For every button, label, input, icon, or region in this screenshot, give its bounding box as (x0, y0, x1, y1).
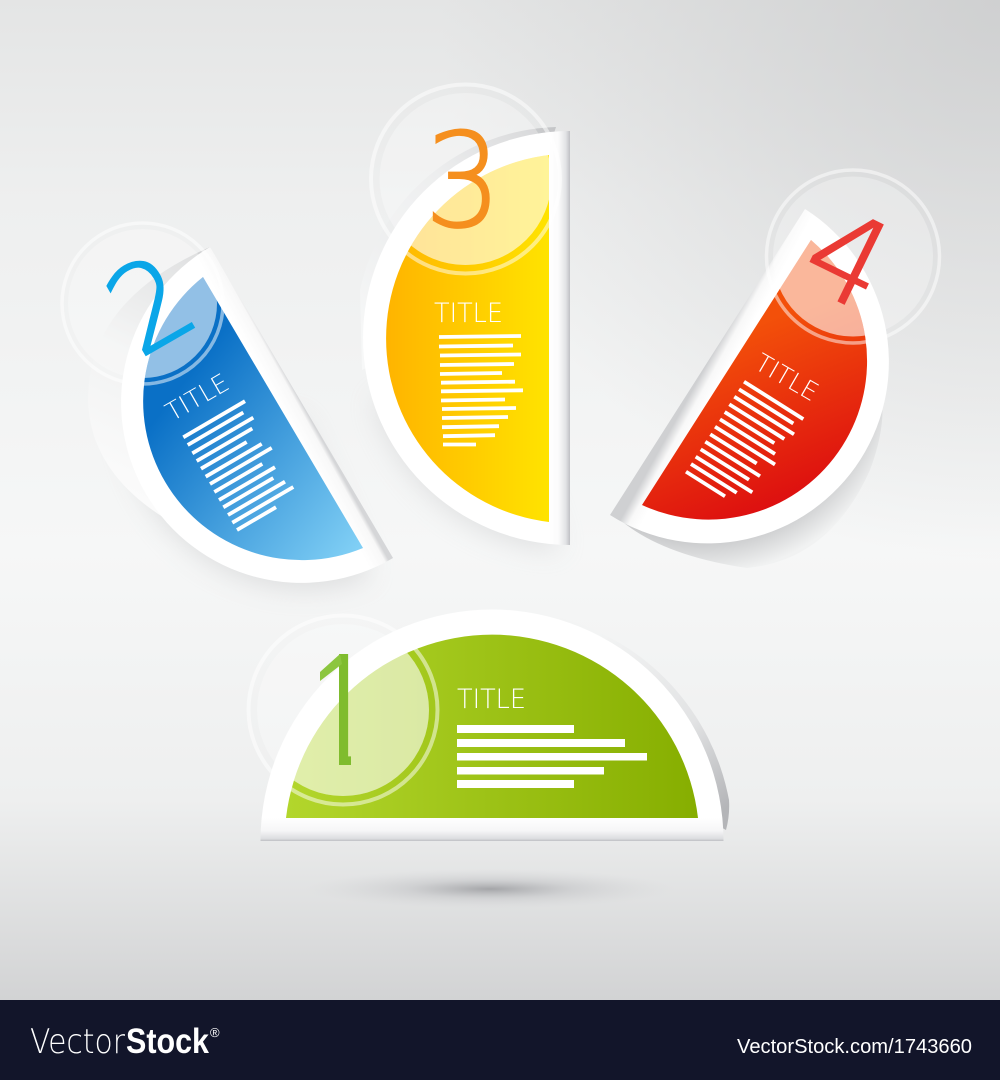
card 4 lens (766, 170, 940, 343)
card 2 number: 2 (84, 226, 218, 383)
card 1: green (248, 609, 729, 841)
card 1 title: TITLE (457, 684, 526, 715)
card 4 title: TITLE (750, 348, 823, 407)
card 4 red segment (642, 240, 867, 520)
card 1 curled back sheet (560, 618, 729, 830)
card 2: blue (62, 223, 393, 587)
card 3 curled back sheet (360, 127, 556, 370)
footer bar (0, 1000, 1000, 1080)
card 2 text lines (183, 401, 293, 530)
card 2 white paper (121, 247, 393, 583)
floor shadow under card 1 (305, 869, 675, 909)
card 1 green segment (286, 635, 698, 818)
card 3 text lines (439, 336, 523, 444)
card 1 number (320, 654, 351, 765)
card 2 lens (88, 222, 224, 386)
card 1 lens (270, 648, 440, 806)
card 3 yellow segment (386, 155, 549, 522)
card 3 white paper (363, 131, 570, 545)
footer registered mark: ® (210, 1025, 220, 1040)
card 3 number: 3 (425, 105, 501, 257)
footer url: VectorStock.com/1743660 (737, 1036, 972, 1058)
card 2 blue segment (143, 277, 363, 560)
card 4: red (610, 170, 940, 568)
card 2 title: TITLE (161, 368, 234, 427)
footer logo (30, 1022, 209, 1062)
card 3 shadow (375, 380, 560, 550)
card 1 white paper (260, 609, 724, 841)
card 2 shadow (125, 420, 370, 587)
card 4 text lines (686, 382, 803, 496)
footer logo: Stock (126, 1022, 209, 1061)
card 3 lens (371, 84, 560, 274)
card 1 text lines (457, 725, 647, 788)
footer logo: Vector (30, 1022, 125, 1062)
card 4 number: 4 (783, 181, 912, 339)
card 3: yellow (360, 84, 570, 550)
card 1 number: 1 (291, 624, 388, 801)
card 3 title: TITLE (434, 298, 503, 329)
card 4 curled back sheet (618, 400, 882, 568)
card 4 white paper (610, 209, 889, 543)
card 2 curled back sheet (88, 247, 300, 530)
